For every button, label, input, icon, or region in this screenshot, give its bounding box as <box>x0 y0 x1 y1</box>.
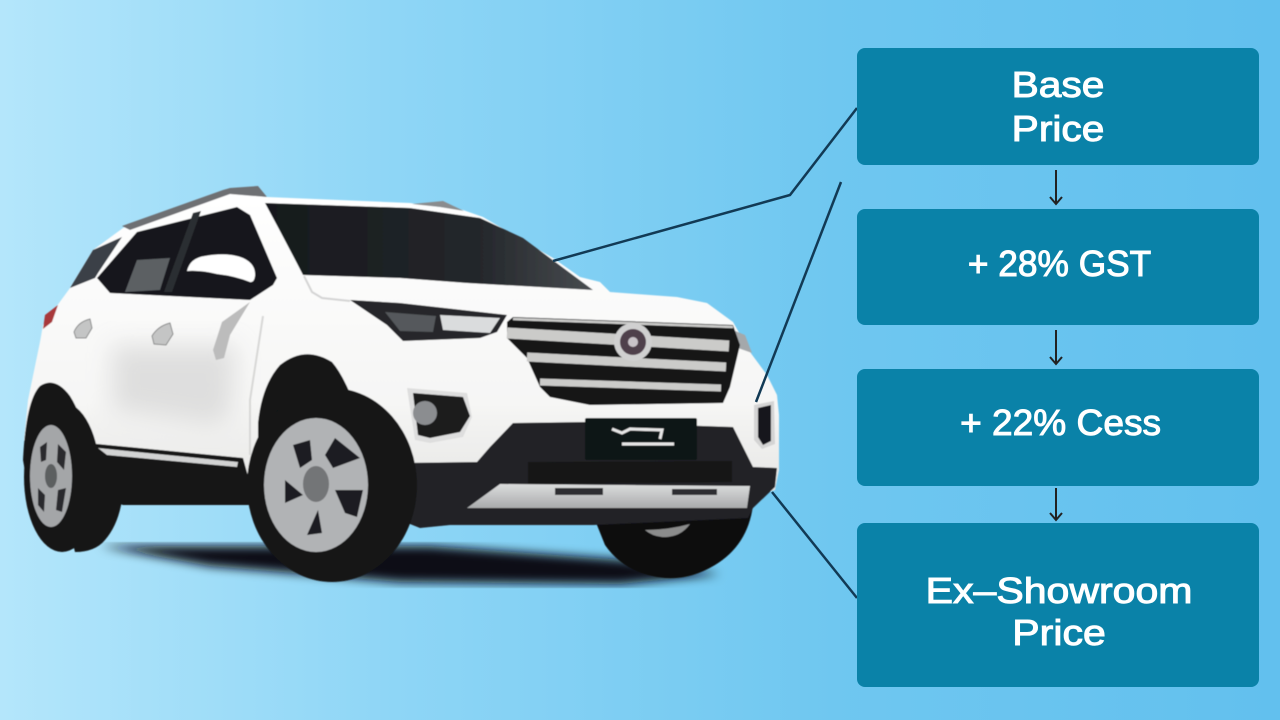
wing mirror <box>187 254 255 282</box>
grille badge <box>614 323 652 361</box>
far front wheel <box>593 505 753 578</box>
number plate <box>585 418 697 460</box>
rear wheel arch <box>23 383 87 500</box>
side sill cladding <box>87 443 256 505</box>
bonnet crease <box>304 276 350 301</box>
car ground shadow <box>100 546 720 584</box>
front wheel <box>247 388 417 582</box>
arrow: base price to GST <box>1050 170 1062 204</box>
rear wheel <box>24 402 100 552</box>
roof rail far side <box>412 201 464 211</box>
connector line: middle <box>756 182 841 402</box>
box: base price <box>857 48 1259 165</box>
box: base price: Price <box>1012 108 1104 148</box>
connector line: top <box>553 108 857 261</box>
taillight <box>43 305 58 329</box>
box: ex-showroom price: Ex–Showroom <box>926 570 1192 611</box>
arrow: cess to ex-showroom <box>1050 488 1062 520</box>
fog lamp left <box>407 388 472 443</box>
roof rail <box>122 186 267 230</box>
door and fender seam <box>250 316 263 455</box>
lower black bumper <box>400 422 777 528</box>
grille chrome bars <box>507 319 733 388</box>
seat seen through window <box>125 258 170 292</box>
front wheel arch <box>258 354 372 490</box>
headlight <box>350 300 507 341</box>
side window frame and glass <box>97 207 277 300</box>
icon: SUV car <box>23 186 779 584</box>
box: cess <box>857 369 1259 486</box>
headlight lens <box>440 315 500 333</box>
door handles <box>74 319 173 345</box>
door pillar <box>164 211 201 292</box>
arrow: GST to cess <box>1050 330 1062 364</box>
box: GST: + 28% GST <box>968 243 1152 284</box>
box: base price: Base <box>1012 64 1104 104</box>
box: GST <box>857 209 1259 325</box>
connector line: bottom <box>772 492 857 598</box>
box: cess: + 22% Cess <box>961 402 1161 442</box>
right fog lamp <box>754 401 775 449</box>
box: ex-showroom price: Price <box>1012 612 1106 653</box>
car body <box>24 192 779 515</box>
grille <box>507 317 740 405</box>
side sill strip <box>98 448 238 467</box>
side marker light <box>733 330 752 353</box>
rear quarter glass <box>70 237 122 288</box>
skid plate <box>467 484 750 508</box>
box: ex-showroom price <box>857 523 1259 687</box>
door reflection <box>213 302 250 360</box>
plate logo <box>612 429 674 444</box>
door shading <box>112 345 236 425</box>
lower air vent <box>528 461 732 484</box>
windshield <box>265 203 593 290</box>
rear tyre tread <box>60 490 122 552</box>
headlight DRL <box>385 312 436 332</box>
